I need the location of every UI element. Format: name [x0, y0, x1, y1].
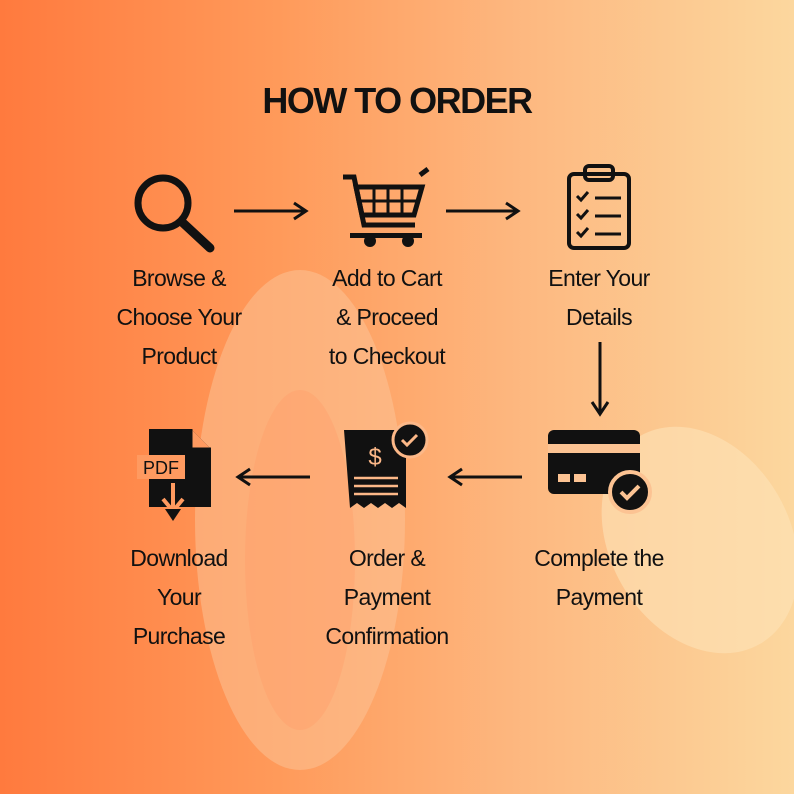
- arrow 1: [234, 202, 309, 220]
- arrow 2: [446, 202, 521, 220]
- text 1: Browse &: [132, 265, 226, 291]
- title: HOW TO ORDER: [262, 80, 532, 121]
- icon: pdf: PDF: [143, 458, 179, 478]
- text 1: [116, 265, 242, 369]
- text 1: Choose Your: [116, 304, 242, 330]
- text 2: & Proceed: [336, 304, 438, 330]
- icon: card: [548, 430, 652, 514]
- text 2: Add to Cart: [332, 265, 442, 291]
- arrow 3: [447, 468, 522, 486]
- text 6: [130, 545, 228, 649]
- text 3: Enter Your: [548, 265, 650, 291]
- text 3: [548, 265, 650, 330]
- text 5: Order &: [349, 545, 425, 571]
- icon: cart: [343, 167, 430, 247]
- text 4: Payment: [556, 584, 642, 610]
- icon: receipt: [344, 422, 428, 508]
- text 4: [534, 545, 664, 610]
- text 2: to Checkout: [329, 343, 445, 369]
- arrow down: [590, 342, 610, 417]
- text 6: Download: [130, 545, 228, 571]
- icon: magnifier: [134, 174, 214, 252]
- text 4: Complete the: [534, 545, 664, 571]
- text 5: Payment: [344, 584, 430, 610]
- text 2: [329, 265, 446, 369]
- text 1: Product: [141, 343, 217, 369]
- text 6: Purchase: [133, 623, 225, 649]
- text 3: Details: [566, 304, 632, 330]
- text 5: [325, 545, 449, 649]
- icon: pdf: [137, 429, 211, 521]
- arrow 4: [235, 468, 310, 486]
- text 5: Confirmation: [325, 623, 449, 649]
- text 6: Your: [157, 584, 201, 610]
- icon: clipboard: [567, 164, 631, 250]
- icon: receipt: $: [368, 444, 382, 471]
